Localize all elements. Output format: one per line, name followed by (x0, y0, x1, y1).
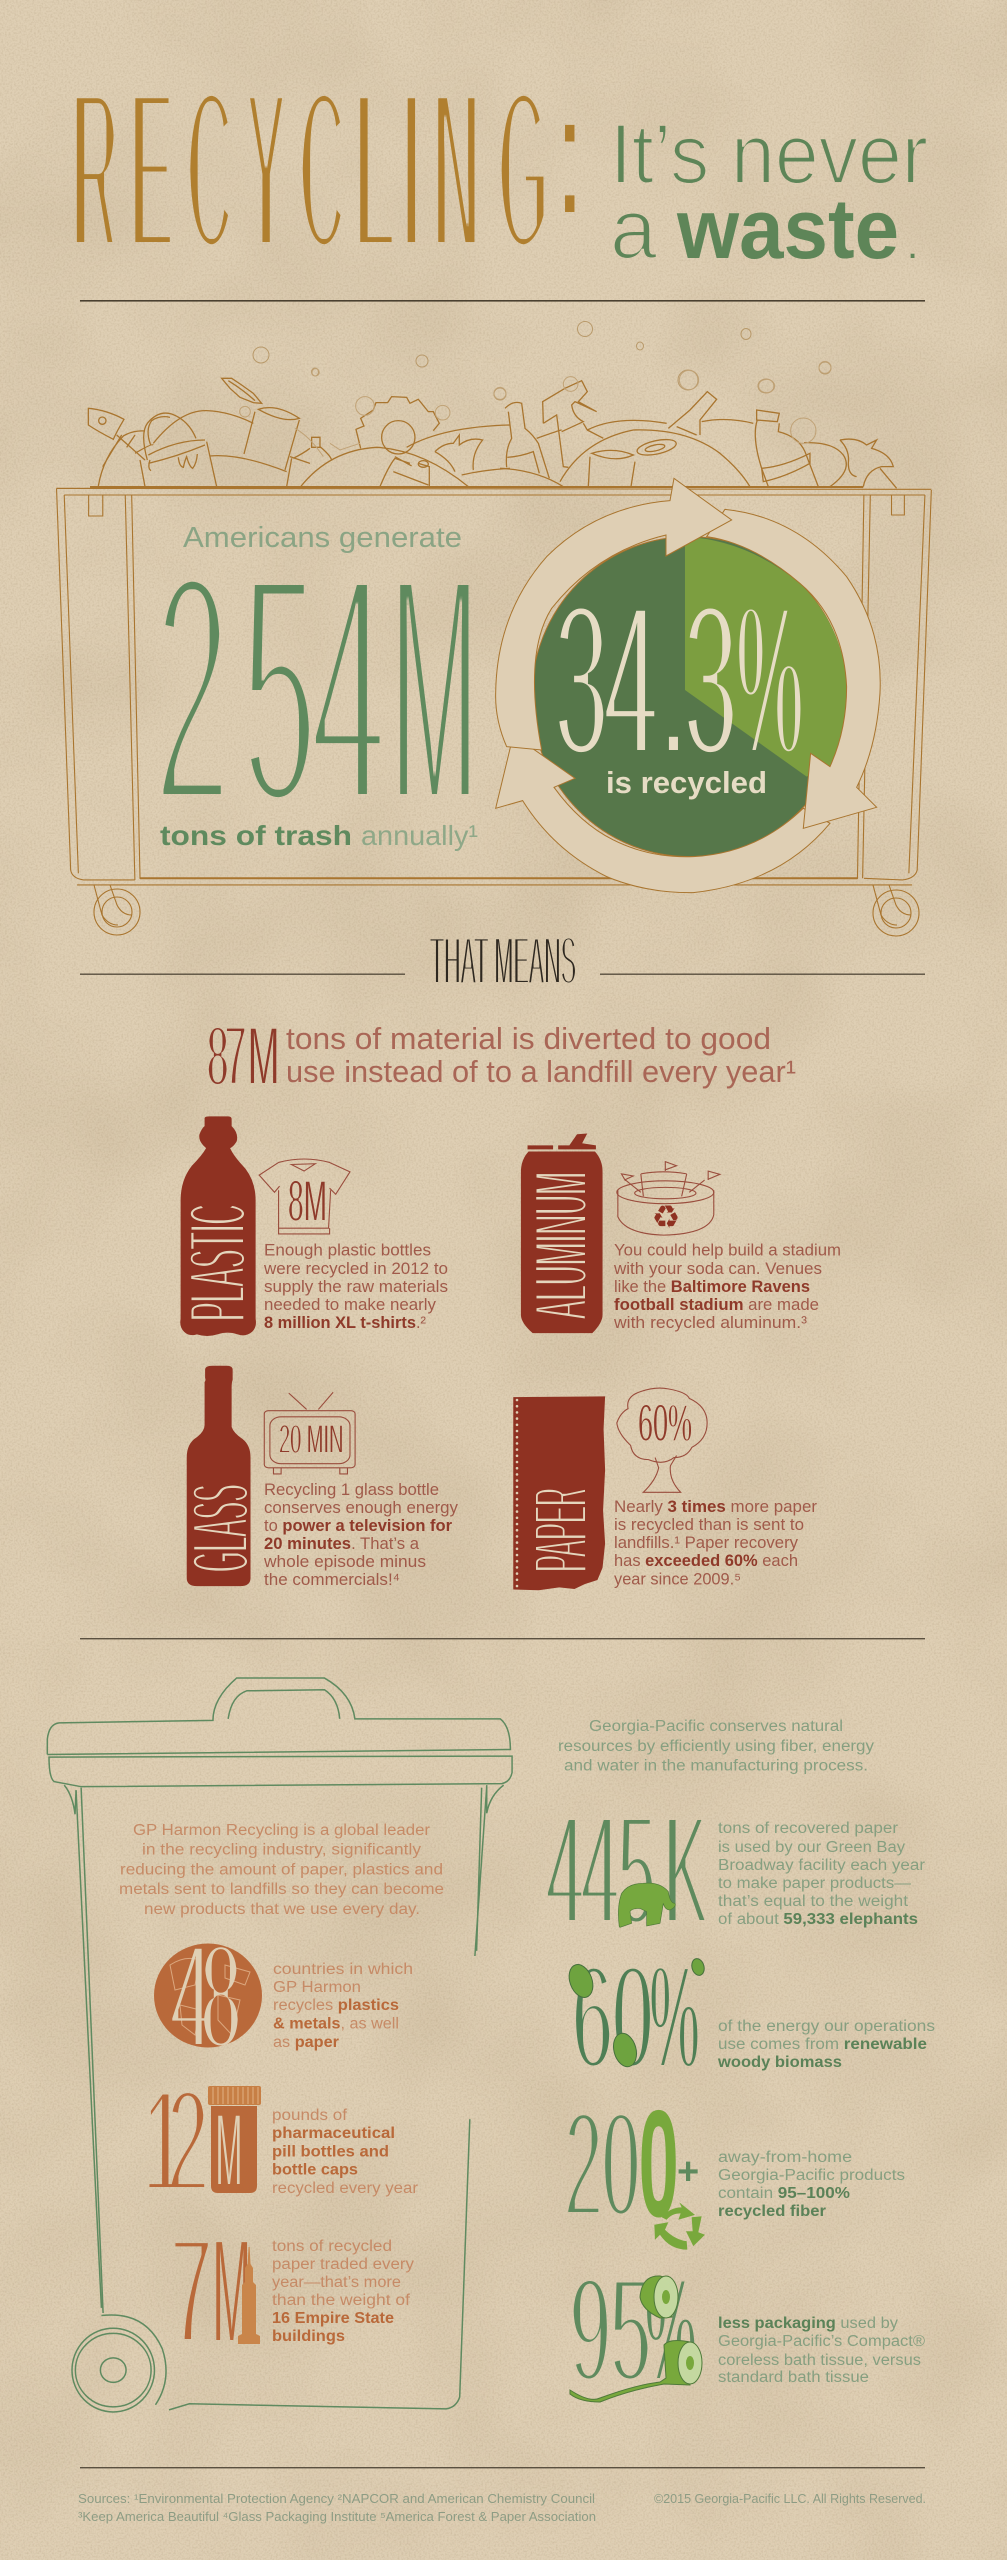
panel: aluminum (519, 1133, 841, 1333)
icon: t-shirt 8M: 8M (288, 1169, 327, 1234)
stat: 12M pounds (144, 2060, 418, 2223)
subtitle: It's never a waste. (610, 107, 928, 276)
text: 48 countries: countries in which (273, 1961, 413, 1978)
stat: 60% (565, 1934, 935, 2100)
icon: 95% with tissue rolls: % (645, 2247, 697, 2413)
stat: 48 countries (154, 1912, 413, 2080)
text: 445K: is used by our Green Bay (718, 1839, 905, 1856)
text: Georgia-Pacific intro: resources by efficiently using fiber, energy (558, 1738, 874, 1755)
headline stat: Americans generate 254M: annually¹ (361, 820, 478, 851)
icon: glass bottle: GLASS (174, 1484, 265, 1572)
icon: globe with 48 (154, 1912, 262, 2080)
text: GP Harmon intro: GP Harmon Recycling is a global leader (133, 1822, 430, 1839)
text: glass (263, 1481, 459, 1589)
text: plastic: Enough plastic bottles (264, 1242, 431, 1260)
text: 7M tons: buildings (272, 2328, 345, 2345)
text: 445K: tons of recovered paper (718, 1820, 898, 1837)
text: plastic: 8 million XL t-shirts.² (264, 1314, 426, 1332)
text: paper (614, 1498, 818, 1588)
text: 7M tons: tons of recycled (272, 2238, 392, 2255)
icon: 12 with pill bottle M (144, 2060, 261, 2223)
panel: trash can GP Harmon (47, 1678, 512, 2412)
stat: 34.3% is recycled: % (736, 560, 803, 802)
icon: 95% with tissue rolls: 95 (570, 2246, 651, 2413)
text: aluminum: football stadium are made (614, 1296, 819, 1314)
text: 60%: woody biomass (717, 2054, 842, 2071)
headline stat: Americans generate 254M: 254 (156, 506, 384, 872)
subtitle: It's never a waste.: waste (676, 182, 899, 276)
icon: glass bottle (174, 1366, 265, 1586)
text: 7M tons: 16 Empire State (272, 2310, 394, 2327)
text: Georgia-Pacific intro (558, 1718, 874, 1774)
text: glass: Recycling 1 glass bottle (264, 1481, 439, 1499)
text: 200+ (718, 2149, 905, 2220)
subtitle: It's never a waste.: It’s never (610, 107, 928, 201)
icon: 12 with pill bottle M: M (216, 2093, 242, 2209)
text: 48 countries: & metals, as well (273, 2016, 399, 2032)
text: 7M tons: paper traded every (272, 2256, 414, 2273)
icon: 200+ with recycling arrows (565, 2079, 705, 2250)
text: paper: landfills.¹ Paper recovery (614, 1534, 799, 1552)
panel: plastic (171, 1116, 448, 1336)
title: RECYCLING: : (556, 63, 584, 247)
panel: glass (174, 1366, 459, 1589)
text: 445K (718, 1820, 925, 1928)
text: paper: year since 2009.⁵ (614, 1570, 741, 1588)
text: glass: whole episode minus (263, 1553, 426, 1571)
text: GP Harmon intro: metals sent to landfills so they can become (119, 1881, 444, 1898)
text: aluminum: You could help build a stadium (614, 1242, 841, 1260)
icon: stadium (617, 1162, 720, 1236)
text: 48 countries (273, 1961, 413, 2051)
text: 200+: recycled fiber (718, 2203, 826, 2220)
pie chart 34.3% (532, 537, 847, 857)
icon: torn paper (513, 1396, 605, 1590)
text: 12M pounds: pounds of (272, 2107, 348, 2124)
text: paper: has exceeded 60% each (614, 1552, 798, 1570)
dumpster (57, 488, 931, 885)
text: 95%: standard bath tissue (718, 2369, 869, 2386)
text: 12M pounds (272, 2107, 418, 2197)
icon: 445K with elephant: 445K (546, 1782, 708, 1958)
text: aluminum (613, 1242, 841, 1332)
headline stat: Americans generate 254M: tons of trash (160, 820, 352, 851)
icon: tree 60%: 60% (638, 1393, 692, 1452)
text: 48 countries: GP Harmon (273, 1979, 361, 1996)
icon: 7M with Empire State building: 7 (172, 2207, 211, 2376)
icon: television 20 MIN (264, 1392, 355, 1474)
text: 60%: use comes from renewable (718, 2036, 927, 2053)
icon: t-shirt 8M (259, 1159, 350, 1234)
trash pile left (88, 369, 510, 487)
title: RECYCLING: RECYCLING (72, 36, 548, 305)
text: 445K: Broadway facility each year (718, 1857, 925, 1874)
panel: Georgia-Pacific (546, 1718, 935, 2413)
icon: 200+ with recycling arrows: 0 (639, 2079, 679, 2249)
icon: 7M with Empire State building: M (213, 2206, 251, 2375)
text: plastic (263, 1242, 448, 1332)
headline stat: Americans generate 254M: Americans generate (183, 522, 462, 554)
stat: 87M diverted: use instead of to a landfill every year¹ (286, 1054, 796, 1089)
text: 95%: less packaging used by (718, 2315, 898, 2332)
text: plastic: supply the raw materials (264, 1278, 448, 1296)
icon: globe with 48: 48 (171, 1912, 241, 2080)
text: 12M pounds: pharmaceutical (272, 2125, 395, 2142)
stat: 87M diverted: tons of material is diverted to good (286, 1021, 771, 1056)
icon: 7M with Empire State building (172, 2206, 260, 2376)
text: 12M pounds: pill bottles and (272, 2144, 389, 2160)
text: paper: Nearly 3 times more paper (614, 1498, 818, 1516)
arrows ring (496, 478, 880, 893)
subtitle: It's never a waste.: a (610, 182, 657, 276)
icon: plastic bottle: PLASTIC (171, 1204, 262, 1321)
footer: sources: Sources: ¹Environmental Protection Agency ²NAPCOR and American Chemistry Council (78, 2492, 595, 2506)
text: glass: conserves enough energy (264, 1499, 459, 1517)
text: 60% (717, 2018, 935, 2071)
dumpster wheel left (94, 885, 140, 935)
text: Georgia-Pacific intro: and water in the manufacturing process. (564, 1758, 868, 1774)
headline stat: Americans generate 254M: M (391, 507, 478, 872)
icon: 95% with tissue rolls (570, 2246, 702, 2413)
text: 445K: to make paper products— (718, 1875, 912, 1892)
panel: paper (513, 1388, 818, 1590)
text: GP Harmon intro: in the recycling industry, significantly (142, 1842, 421, 1858)
text: glass: to power a television for (264, 1517, 453, 1535)
stat: 95% (570, 2246, 926, 2413)
text: 95%: coreless bath tissue, versus (718, 2352, 921, 2369)
subtitle: It's never a waste.: . (907, 223, 918, 267)
icon: stadium: ♻ (652, 1198, 680, 1236)
icon: torn paper: PAPER (519, 1488, 604, 1572)
text: 200+: contain 95–100% (718, 2185, 850, 2202)
stat: 34.3% is recycled: 34.3 (555, 559, 737, 802)
text: 60%: of the energy our operations (718, 2018, 935, 2035)
text: 95% (718, 2315, 926, 2386)
stat: 87M diverted: 87M (207, 1009, 279, 1103)
text: 95%: Georgia-Pacific’s Compact® (718, 2333, 926, 2350)
footer: sources: ³Keep America Beautiful ⁴Glass Packaging Institute ⁵America Forest & Paper Association (78, 2510, 596, 2524)
text: 200+: away-from-home (718, 2149, 852, 2166)
text: glass: 20 minutes. That’s a (264, 1535, 420, 1553)
text: 7M tons: year—that’s more (272, 2274, 401, 2291)
text: GP Harmon intro: new products that we use every day. (144, 1901, 420, 1918)
icon: 200+ with recycling arrows: 20 (565, 2080, 639, 2248)
trash can outline (47, 1678, 512, 2412)
stat: 34.3% is recycled: is recycled (606, 765, 767, 800)
icon: 60% with leaves: % (650, 1934, 699, 2100)
text: plastic: were recycled in 2012 to (263, 1260, 448, 1278)
stat: 445K (546, 1782, 925, 1958)
text: 48 countries: as paper (273, 2034, 339, 2051)
text: 48 countries: recycles plastics (273, 1997, 399, 2014)
text: 12M pounds: bottle caps (272, 2162, 358, 2178)
icon: plastic bottle (171, 1116, 262, 1336)
stat: 200+ (565, 2079, 905, 2250)
text: plastic: needed to make nearly (264, 1296, 437, 1314)
text: 445K: that’s equal to the weight (718, 1893, 909, 1910)
dumpster wheel right (873, 885, 919, 936)
text: paper: is recycled than is sent to (614, 1516, 804, 1534)
text: GP Harmon intro: reducing the amount of paper, plastics and (120, 1862, 443, 1878)
icon: television 20 MIN: 20 MIN (279, 1416, 343, 1462)
text: 445K: of about 59,333 elephants (718, 1911, 918, 1928)
recycling pie with arrows (496, 478, 880, 893)
stat: 87M diverted (207, 1009, 796, 1103)
text: 7M tons (272, 2238, 414, 2345)
text: 12M pounds: recycled every year (272, 2180, 418, 2197)
footer: sources (78, 2492, 596, 2524)
text: glass: the commercials!⁴ (264, 1571, 400, 1589)
text: Georgia-Pacific intro: Georgia-Pacific conserves natural (589, 1718, 843, 1735)
bubbles above trash (253, 322, 831, 400)
icon: 12 with pill bottle M: 12 (144, 2060, 208, 2223)
icon: 60% with leaves (565, 1934, 706, 2100)
stat: 7M tons (172, 2206, 414, 2376)
heading: THAT MEANS: THAT MEANS (430, 922, 576, 999)
icon: tree 60% (617, 1388, 707, 1492)
text: aluminum: with recycled aluminum.³ (613, 1314, 808, 1332)
text: 7M tons: than the weight of (272, 2292, 411, 2309)
trash pile right (500, 361, 897, 488)
icon: 200+ with recycling arrows: + (677, 2151, 699, 2193)
text: aluminum: like the Baltimore Ravens (614, 1278, 810, 1296)
text: 200+: Georgia-Pacific products (718, 2167, 905, 2184)
text: GP Harmon intro (119, 1822, 444, 1918)
icon: soda can: ALUMINUM (519, 1172, 604, 1319)
text: aluminum: with your soda can. Venues (613, 1260, 822, 1278)
icon: 60% with leaves: 60 (572, 1934, 653, 2100)
footer: copyright: ©2015 Georgia-Pacific LLC. All Rights Reserved. (654, 2492, 926, 2506)
